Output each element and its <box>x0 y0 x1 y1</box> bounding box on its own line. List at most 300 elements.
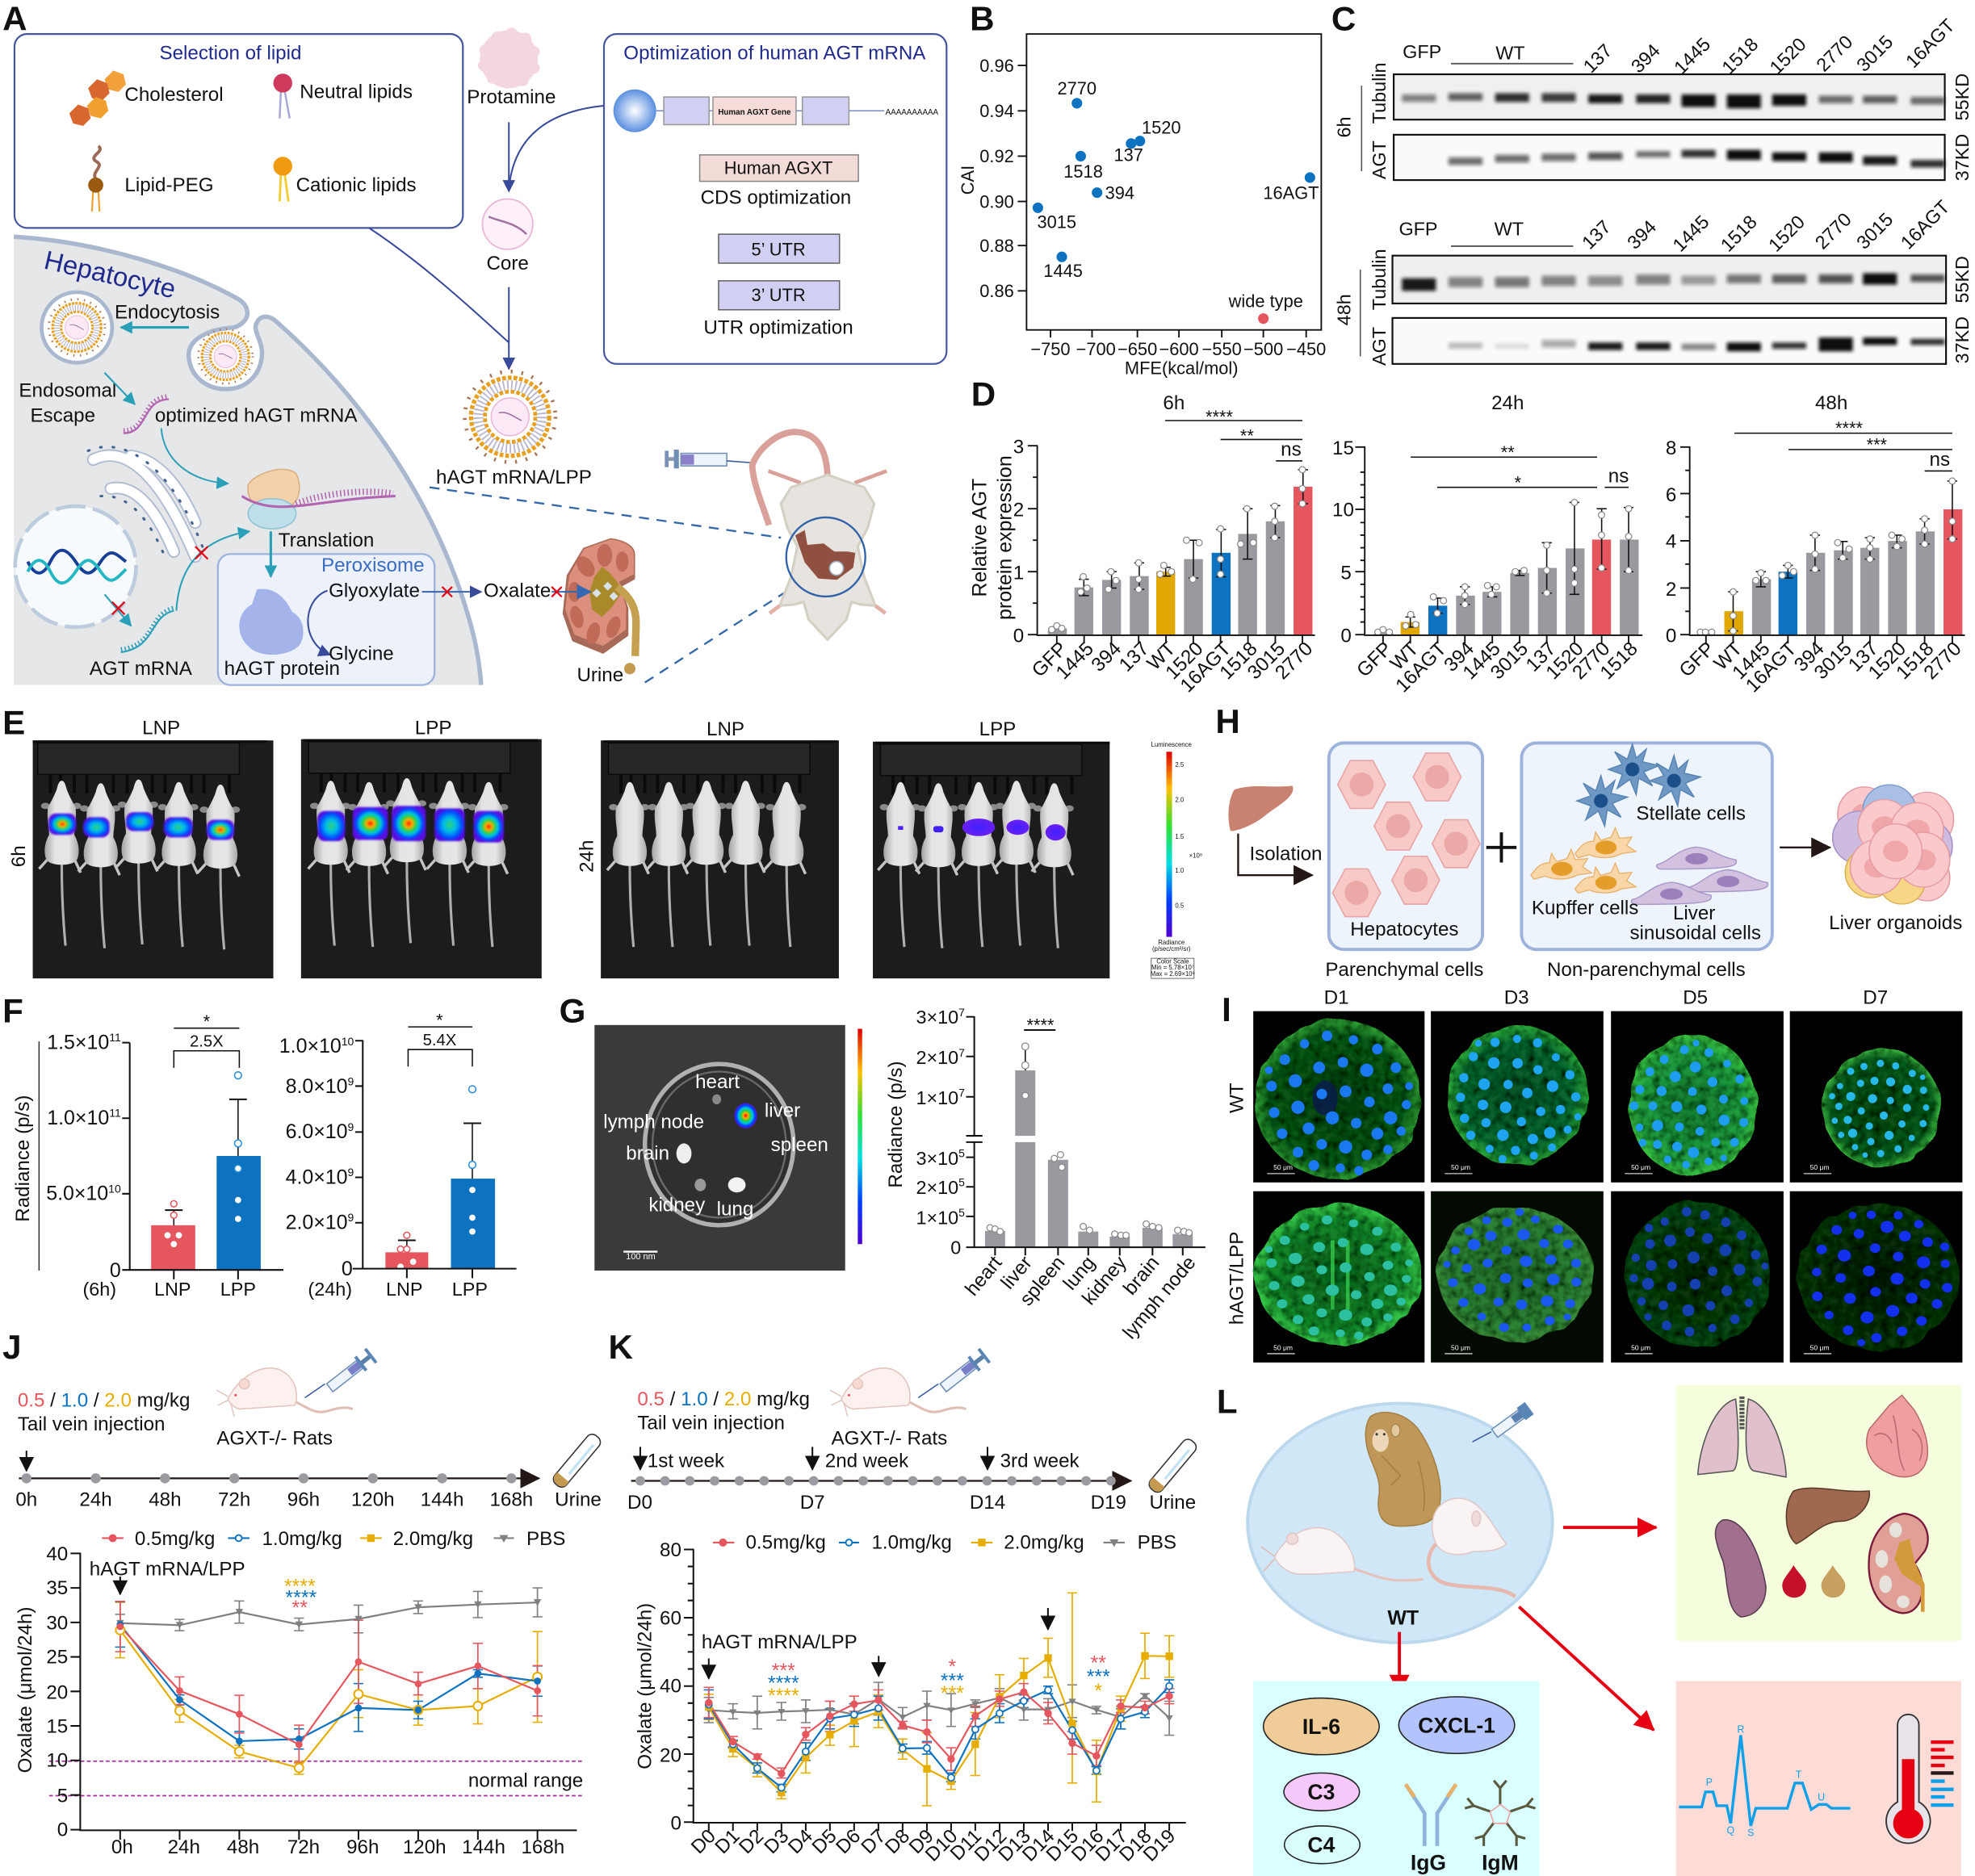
luminescence colour scale: ×10⁸ <box>1189 852 1202 859</box>
line chart: D8 <box>881 1825 914 1858</box>
endosomal escape and mRNA: optimized hAGT mRNA <box>155 405 358 427</box>
6h blot labels: Tubulin <box>1369 63 1390 124</box>
chart 24h: 9 <box>348 1120 354 1133</box>
chart 24h: 15 <box>1332 438 1354 459</box>
chart 6h: LPP <box>220 1279 256 1300</box>
chart 24h: 394 <box>1440 638 1478 676</box>
ribosome and translation: Translation <box>279 530 374 551</box>
chart 48h: 137 <box>1844 638 1883 676</box>
chart 24h: 24h <box>1491 392 1524 414</box>
chart 48h: 3015 <box>1810 638 1856 684</box>
line chart: D2 <box>735 1825 768 1858</box>
line chart: 25 <box>46 1647 68 1669</box>
line chart: D4 <box>784 1825 817 1858</box>
48h blot labels: 3015 <box>1852 208 1897 253</box>
6h blot labels: 1520 <box>1766 34 1810 78</box>
column and row labels: D7 <box>1863 986 1888 1008</box>
legend: PBS <box>1138 1532 1176 1554</box>
line chart: D3 <box>760 1825 793 1858</box>
nucleus with DNA: AGT mRNA <box>90 658 193 680</box>
timeline: D14 <box>970 1492 1005 1514</box>
6h blot labels <box>1333 15 1973 181</box>
kidney: Urine <box>577 664 623 686</box>
vital signs panel: P <box>1706 1777 1713 1788</box>
6h blot labels: 1518 <box>1717 34 1762 78</box>
timeline: 120h <box>351 1489 395 1511</box>
panel I: organoid fluorescence grid: 50 μm <box>1631 1343 1650 1351</box>
selection of lipid box <box>15 34 463 228</box>
panel G: ex vivo imaging and bar chart <box>560 992 1206 1343</box>
6h AGT blot <box>1394 135 1945 180</box>
line chart: D14 <box>1018 1825 1059 1866</box>
chart 24h: 2.0×10 <box>286 1212 348 1234</box>
mRNA optimization box <box>604 34 946 364</box>
hAGT/LPP D5 <box>1604 1182 1786 1363</box>
dosing text <box>637 1388 947 1449</box>
protamine blob: Protamine <box>467 86 556 108</box>
bar chart: 7 <box>958 1006 965 1019</box>
colour scale <box>858 1028 862 1244</box>
line chart: Oxalate (μmol/24h) <box>15 1606 36 1773</box>
icon: urine tube <box>551 1432 603 1489</box>
bar chart: 2×10 <box>916 1177 958 1198</box>
data points <box>1033 98 1315 324</box>
luminescence colour scale: 2.5 <box>1175 761 1184 768</box>
timeline: D7 <box>800 1492 825 1514</box>
chart 24h: 9 <box>348 1166 354 1179</box>
chart 24h: 9 <box>348 1075 354 1088</box>
panel letter F: F <box>2 992 23 1030</box>
6h blot labels: 394 <box>1627 40 1664 77</box>
chart 48h: WT <box>1710 638 1746 675</box>
line chart: 24h <box>168 1836 200 1858</box>
red arrows <box>1399 1527 1656 1730</box>
cytokine panel: IgG <box>1411 1851 1446 1875</box>
chart 48h: 6 <box>1666 484 1676 506</box>
chart 6h: 1 <box>1013 563 1024 584</box>
chart 6h: 2.5X <box>190 1032 224 1050</box>
chart 6h: 6h <box>1163 392 1185 414</box>
panel L: safety evaluation schematic <box>1217 1382 1961 1876</box>
liver organoid cluster <box>1829 785 1962 934</box>
panel K: repeat dose study <box>608 1328 1199 1866</box>
timeline: 48h <box>149 1489 182 1511</box>
luminescence colour scale: 0.5 <box>1175 902 1184 910</box>
endocytosis vesicles: Endocytosis <box>115 302 220 324</box>
non-parenchymal cells box <box>1521 743 1772 981</box>
chart 6h: (6h) <box>82 1279 116 1300</box>
chart 48h: 48h <box>1815 392 1847 414</box>
chart 6h: GFP <box>1028 638 1071 681</box>
panel letter B: B <box>970 0 995 37</box>
panel letter G: G <box>560 992 585 1030</box>
ribosome and translation <box>242 469 396 576</box>
48h blot labels <box>1333 196 1973 366</box>
core <box>482 199 533 274</box>
vital signs panel: R <box>1737 1723 1744 1735</box>
panel H: liver organoid schematic <box>1215 702 1962 981</box>
bar chart: heart <box>961 1252 1006 1300</box>
endosomal escape and mRNA <box>19 373 358 484</box>
icon: rat and syringe <box>216 1348 377 1417</box>
chart 24h: 137 <box>1522 638 1560 676</box>
arrow to organoids <box>1780 847 1830 848</box>
endosomal escape and mRNA: Escape <box>30 405 95 427</box>
chart 24h: 5 <box>1340 563 1352 584</box>
chart 24h: 2770 <box>1568 638 1614 684</box>
chart 6h: 1.0×10 <box>47 1107 109 1129</box>
organ image: lymph node <box>603 1112 704 1133</box>
line chart: **** <box>284 1575 316 1598</box>
line chart: **** <box>285 1586 317 1609</box>
line chart: *** <box>941 1682 964 1705</box>
mRNA optimization box: 3’ UTR <box>751 285 806 305</box>
chart 6h: 137 <box>1115 638 1153 676</box>
column and row labels: D1 <box>1324 986 1349 1008</box>
chart 24h: 10 <box>342 1035 354 1048</box>
chart 48h: ns <box>1930 449 1950 471</box>
image: LNP 6h <box>33 740 274 978</box>
dosing text: AGXT-/- Rats <box>832 1427 947 1449</box>
timeline: Urine <box>555 1489 602 1511</box>
dosing text: AGXT-/- Rats <box>216 1427 333 1449</box>
chart 6h: 0 <box>1013 626 1024 647</box>
line chart: D15 <box>1042 1825 1083 1866</box>
panel I: organoid fluorescence grid <box>1222 986 1965 1363</box>
line chart: D0 <box>687 1825 720 1858</box>
chart 6h: 2 <box>1013 500 1024 521</box>
6h blot labels: 1445 <box>1670 34 1714 78</box>
48h blot labels: 16AGT <box>1897 196 1954 253</box>
panel A: mechanism schematic <box>2 0 946 686</box>
axis labels: −650 <box>1117 339 1157 359</box>
chart 6h: LNP <box>154 1279 191 1300</box>
legend: 2.0mg/kg <box>393 1528 473 1550</box>
line chart: D5 <box>808 1825 841 1858</box>
line chart: 0 <box>670 1813 681 1835</box>
point labels: 3015 <box>1038 211 1076 232</box>
cytokine panel: CXCL-1 <box>1418 1713 1495 1737</box>
icon: rat and syringe <box>830 1348 991 1417</box>
cytokine panel: C4 <box>1307 1833 1336 1857</box>
chart 6h: 11 <box>109 1107 121 1120</box>
non-parenchymal cells box: sinusoidal cells <box>1629 923 1761 944</box>
line chart: D17 <box>1092 1825 1132 1866</box>
column and row labels <box>1227 986 1888 1325</box>
luminescence colour scale <box>1151 741 1202 978</box>
cytokine panel: IL-6 <box>1302 1715 1340 1739</box>
image labels: 24h <box>577 840 598 873</box>
WT D3 <box>1429 1011 1605 1187</box>
scale bars <box>1267 1174 1831 1354</box>
timeline: 96h <box>287 1489 320 1511</box>
line chart: D6 <box>832 1825 865 1858</box>
legend: 1.0mg/kg <box>262 1528 342 1550</box>
dashed zoom lines <box>430 488 790 682</box>
chart 6h: 3015 <box>1243 638 1289 684</box>
48h blot labels: 55KD <box>1952 256 1973 304</box>
image: LPP 6h <box>301 739 542 978</box>
chart 48h: 4 <box>1666 531 1676 553</box>
hAGT/LPP D3 <box>1425 1191 1605 1363</box>
axis labels <box>958 56 1326 378</box>
chart 24h: 1.0×10 <box>279 1035 342 1057</box>
axis labels: 0.88 <box>979 236 1014 256</box>
hepatocyte cell <box>14 237 481 685</box>
line chart: D19 <box>1139 1825 1180 1866</box>
LPP nanoparticle <box>436 371 592 488</box>
line chart: 30 <box>46 1613 68 1635</box>
selection of lipid box: Selection of lipid <box>160 42 301 64</box>
line chart: Oxalate (μmol/24h) <box>634 1603 656 1769</box>
chart 24h: * <box>436 1010 443 1030</box>
panel letter A: A <box>2 0 27 37</box>
chart 24h: LPP <box>452 1279 488 1300</box>
dosing text: Tail vein injection <box>18 1413 165 1435</box>
chart 24h: 3015 <box>1486 638 1533 684</box>
parenchymal cells box: Parenchymal cells <box>1325 959 1483 981</box>
line chart: * <box>948 1656 956 1678</box>
column and row labels: WT <box>1227 1082 1248 1113</box>
6h blot labels: 16AGT <box>1902 15 1959 72</box>
WT D1 <box>1253 1011 1424 1183</box>
dosing text: 0.5 / 1.0 / 2.0 mg/kg <box>637 1388 810 1410</box>
line chart: 72h <box>287 1836 320 1858</box>
plus sign <box>1486 832 1516 863</box>
48h tubulin blot <box>1393 256 1946 304</box>
luminescence colour scale: Luminescence <box>1151 741 1192 748</box>
bar chart: 3×10 <box>916 1148 958 1169</box>
line chart: D18 <box>1115 1825 1156 1866</box>
48h blot labels: Tubulin <box>1369 249 1390 310</box>
chart 6h: 16AGT <box>1176 638 1235 697</box>
chart 24h <box>1332 392 1642 697</box>
bar chart: spleen <box>1016 1252 1069 1310</box>
legend: 1.0mg/kg <box>871 1532 952 1554</box>
LPP nanoparticle: hAGT mRNA/LPP <box>436 467 592 488</box>
bar chart: 7 <box>958 1087 965 1099</box>
dosing text <box>18 1389 333 1449</box>
48h blot labels: WT <box>1495 219 1524 240</box>
image labels: LNP <box>707 718 744 740</box>
bar chart: brain <box>1119 1252 1164 1300</box>
line chart: 60 <box>660 1607 681 1629</box>
line chart: hAGT mRNA/LPP <box>702 1631 858 1653</box>
bar chart: 5 <box>958 1147 965 1160</box>
line chart: ** <box>1091 1652 1106 1674</box>
mRNA optimization box: 5’ UTR <box>751 240 806 260</box>
bar chart: kidney <box>1078 1251 1131 1309</box>
chart 6h: 3 <box>1013 437 1024 459</box>
bar chart: **** <box>1027 1015 1055 1036</box>
line chart: 120h <box>403 1836 447 1858</box>
assembly arrows <box>369 106 603 369</box>
chart 6h: 1445 <box>1052 638 1098 684</box>
line chart: 10 <box>46 1750 68 1772</box>
chart 24h: 16AGT <box>1391 638 1451 697</box>
6h blot labels: 3015 <box>1852 31 1897 76</box>
chart 6h <box>39 1011 283 1300</box>
bar chart: liver <box>997 1252 1037 1293</box>
panel B: scatter plot <box>958 0 1326 378</box>
line chart: *** <box>772 1660 795 1682</box>
oxalate pathway: Oxalate <box>484 580 551 601</box>
chart 48h: 2 <box>1666 579 1676 601</box>
icon: urine tube <box>1147 1437 1199 1495</box>
line chart: 168h <box>521 1836 564 1858</box>
line chart <box>634 1539 1186 1866</box>
line chart: 20 <box>660 1744 681 1766</box>
6h blot labels: 37KD <box>1952 134 1973 181</box>
selection of lipid box: Lipid-PEG <box>124 174 214 196</box>
6h blot labels: 2770 <box>1812 31 1856 76</box>
protamine blob <box>467 27 556 108</box>
timeline: 0h <box>15 1489 37 1511</box>
panel letter H: H <box>1215 702 1240 740</box>
panel C: western blots <box>1331 0 1973 366</box>
line chart: 40 <box>46 1543 68 1565</box>
line chart: hAGT mRNA/LPP <box>90 1558 245 1580</box>
panel letter C: C <box>1331 0 1356 37</box>
48h AGT blot <box>1393 318 1946 364</box>
6h blot labels: 137 <box>1579 40 1616 77</box>
WT animals circle <box>1247 1402 1553 1643</box>
non-parenchymal cells box: Stellate cells <box>1636 803 1746 825</box>
y axis title <box>968 455 1017 620</box>
axis labels: 0.96 <box>979 56 1014 76</box>
bar chart: 0 <box>950 1237 961 1258</box>
panel D: AGT expression bar charts <box>968 375 1966 697</box>
6h blot labels: AGT <box>1369 140 1390 179</box>
axis labels: −700 <box>1076 339 1116 359</box>
panel letter K: K <box>608 1328 633 1366</box>
hAGT/LPP D1 <box>1253 1191 1424 1363</box>
bar chart: 5 <box>958 1206 965 1219</box>
6h blot labels: 6h <box>1333 117 1354 138</box>
image labels: LPP <box>415 717 451 739</box>
chart 24h: 0 <box>1340 626 1352 647</box>
48h blot labels: AGT <box>1369 327 1390 366</box>
column and row labels: hAGT/LPP <box>1227 1232 1248 1325</box>
chart 24h: GFP <box>1352 638 1397 681</box>
parenchymal cells box <box>1325 743 1483 981</box>
6h blot labels: GFP <box>1403 41 1441 62</box>
axis labels: 0.92 <box>979 146 1014 166</box>
timeline: 24h <box>79 1489 112 1511</box>
WT D7 <box>1790 1011 1962 1183</box>
selection of lipid box: Neutral lipids <box>300 82 413 103</box>
timeline: 72h <box>218 1489 250 1511</box>
chart 24h: ** <box>1501 442 1515 463</box>
chart 24h: 6.0×10 <box>286 1120 348 1143</box>
legend: 0.5mg/kg <box>745 1532 826 1554</box>
chart 48h: 1520 <box>1864 638 1910 684</box>
48h blot labels: 137 <box>1578 216 1615 253</box>
chart 24h: 8.0×10 <box>286 1075 348 1098</box>
48h blot labels: GFP <box>1398 219 1438 240</box>
chart 48h: *** <box>1867 434 1888 454</box>
hAGT/LPP D7 <box>1790 1191 1965 1363</box>
axis labels: −450 <box>1286 339 1326 359</box>
peroxisome: Glycine <box>329 643 394 664</box>
mRNA optimization box: Human AGXT <box>724 157 832 178</box>
chart 24h: 4.0×10 <box>286 1166 348 1188</box>
column and row labels: D3 <box>1504 986 1529 1008</box>
syringe <box>665 450 752 468</box>
liver organoid cluster: Liver organoids <box>1829 912 1962 934</box>
chart 24h: (24h) <box>308 1279 352 1300</box>
point labels: 16AGT <box>1263 182 1319 203</box>
image labels: LNP <box>142 717 180 739</box>
bar chart: 7 <box>958 1046 965 1059</box>
axis labels: −500 <box>1243 339 1283 359</box>
line chart: 15 <box>46 1715 68 1737</box>
axis labels: 0.86 <box>979 281 1014 301</box>
mRNA optimization box: Human AGXT Gene <box>718 108 791 117</box>
vital signs panel: S <box>1747 1827 1754 1838</box>
chart 24h: 1520 <box>1542 638 1588 684</box>
image: LNP 24h <box>601 740 839 978</box>
y axis title: protein expression <box>994 455 1017 620</box>
line chart: D13 <box>994 1825 1035 1866</box>
chart 24h: 0 <box>342 1258 353 1280</box>
mRNA optimization box: AAAAAAAAAA <box>886 108 939 117</box>
bar chart: Radiance (p/s) <box>885 1061 907 1188</box>
vital signs panel: T <box>1796 1769 1802 1781</box>
line chart: *** <box>941 1669 964 1692</box>
timeline: 3rd week <box>1000 1450 1080 1472</box>
chart 24h: * <box>1514 472 1521 492</box>
image labels <box>8 717 1016 873</box>
peroxisome: hAGT protein <box>224 658 340 680</box>
chart 24h: 9 <box>348 1211 354 1224</box>
panel I: organoid fluorescence grid: 50 μm <box>1810 1343 1830 1351</box>
chart 6h: 1518 <box>1216 638 1262 684</box>
endocytosis vesicles <box>41 292 253 383</box>
image: LPP 24h <box>873 742 1109 978</box>
timeline: 1st week <box>648 1450 725 1472</box>
48h blot labels: 394 <box>1623 216 1660 253</box>
chart 48h: 1445 <box>1728 638 1775 684</box>
line chart: *** <box>1087 1666 1110 1689</box>
line chart: D9 <box>905 1825 938 1858</box>
chart 48h: 394 <box>1790 638 1829 676</box>
axis labels: −750 <box>1030 339 1071 359</box>
bar chart: 1×10 <box>916 1207 958 1228</box>
panel E: bioluminescence images <box>2 703 1202 978</box>
liver and isolation arrow: Isolation <box>1249 843 1322 865</box>
point labels: 1445 <box>1043 261 1083 281</box>
bar chart: 2×10 <box>916 1047 958 1068</box>
line chart: 20 <box>46 1681 68 1703</box>
WT animals circle: WT <box>1387 1606 1419 1629</box>
line chart: D11 <box>946 1825 986 1865</box>
point labels: 1518 <box>1063 161 1103 182</box>
chart 24h: ns <box>1608 465 1629 487</box>
chart 24h: 1445 <box>1459 638 1505 684</box>
line chart: D1 <box>711 1825 744 1858</box>
dosing text: 0.5 / 1.0 / 2.0 mg/kg <box>18 1389 190 1411</box>
line chart: 40 <box>660 1676 681 1698</box>
timeline: Urine <box>1149 1492 1196 1514</box>
luminescence colour scale: Color Scale <box>1156 957 1189 965</box>
bar chart <box>885 1006 1206 1343</box>
chart 24h: 5.4X <box>423 1032 457 1049</box>
chart 6h: 5.0×10 <box>46 1183 108 1205</box>
chart 48h: 8 <box>1666 438 1676 459</box>
organ image: heart <box>695 1071 740 1093</box>
line chart: D16 <box>1067 1825 1108 1866</box>
